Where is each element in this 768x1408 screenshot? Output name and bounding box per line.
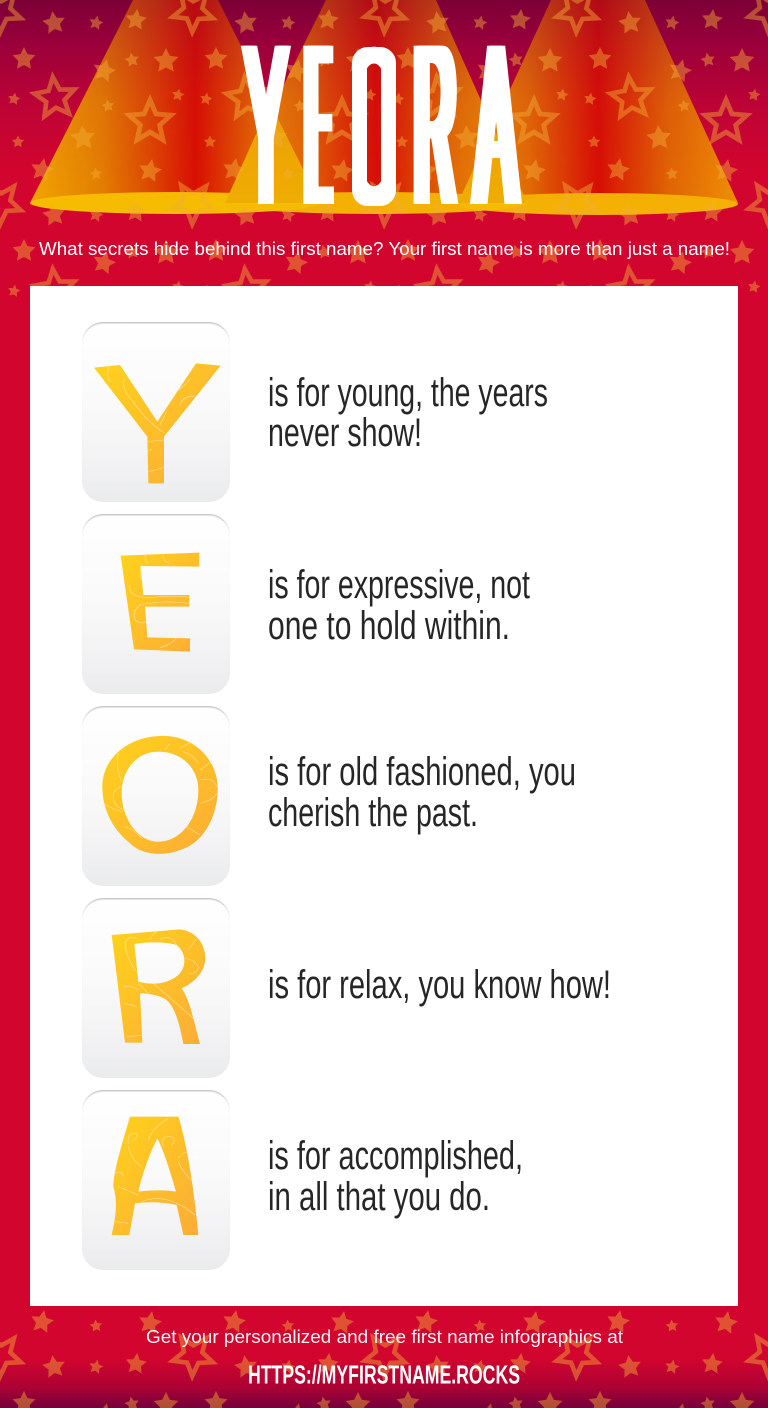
spotlights <box>30 0 738 215</box>
footer text <box>146 1326 623 1390</box>
icon: letter E <box>120 552 200 652</box>
footer text: Get your personalized and free first name infographics at <box>146 1326 623 1347</box>
title: A <box>476 0 516 253</box>
icon: letter R <box>112 929 206 1044</box>
icon: letter O <box>102 736 218 854</box>
title: E <box>306 0 330 253</box>
footer text: HTTPS://MYFIRSTNAME.ROCKS <box>248 1360 520 1390</box>
text: A line: in all that you do. <box>268 1175 490 1219</box>
row: Y <box>82 322 548 502</box>
card: E <box>82 514 230 694</box>
text: A line <box>268 1134 523 1219</box>
row: A <box>82 1090 523 1270</box>
star pattern: top <box>0 0 768 300</box>
icon: letter A <box>112 1116 198 1235</box>
title: R <box>414 0 455 253</box>
title: O <box>350 1 398 248</box>
text: E line <box>268 563 530 648</box>
panel: white content <box>30 286 738 1306</box>
text: R line: is for relax, you know how! <box>268 963 611 1007</box>
row: R <box>82 898 611 1078</box>
spotlight overlap: middle and right <box>458 127 527 203</box>
spotlight: right <box>458 0 738 215</box>
spotlight overlap: left and middle <box>225 118 304 203</box>
text: A line: is for accomplished, <box>268 1134 523 1178</box>
title <box>240 0 522 253</box>
card: A <box>82 1090 230 1270</box>
card: R <box>82 898 230 1078</box>
text: O line: is for old fashioned, you <box>268 750 576 794</box>
subtitle: What secrets hide behind this first name? Your first name is more than just a name! <box>39 238 730 259</box>
icon: letter Y <box>94 363 221 484</box>
text: Y line <box>268 371 548 455</box>
text: Y line: never show! <box>268 411 422 455</box>
star pattern: bottom <box>0 1306 768 1408</box>
text: O line: cherish the past. <box>268 791 478 835</box>
row: O <box>82 706 576 886</box>
text: Y line: is for young, the years <box>268 371 548 415</box>
spotlight: middle <box>273 0 527 214</box>
card: O <box>82 706 230 886</box>
row: E <box>82 514 530 694</box>
title: Y <box>244 0 288 253</box>
text: O line <box>268 750 576 835</box>
card: Y <box>82 322 230 502</box>
text: E line: one to hold within. <box>268 604 510 648</box>
spotlight: left <box>30 0 320 214</box>
text: E line: is for expressive, not <box>268 563 530 607</box>
